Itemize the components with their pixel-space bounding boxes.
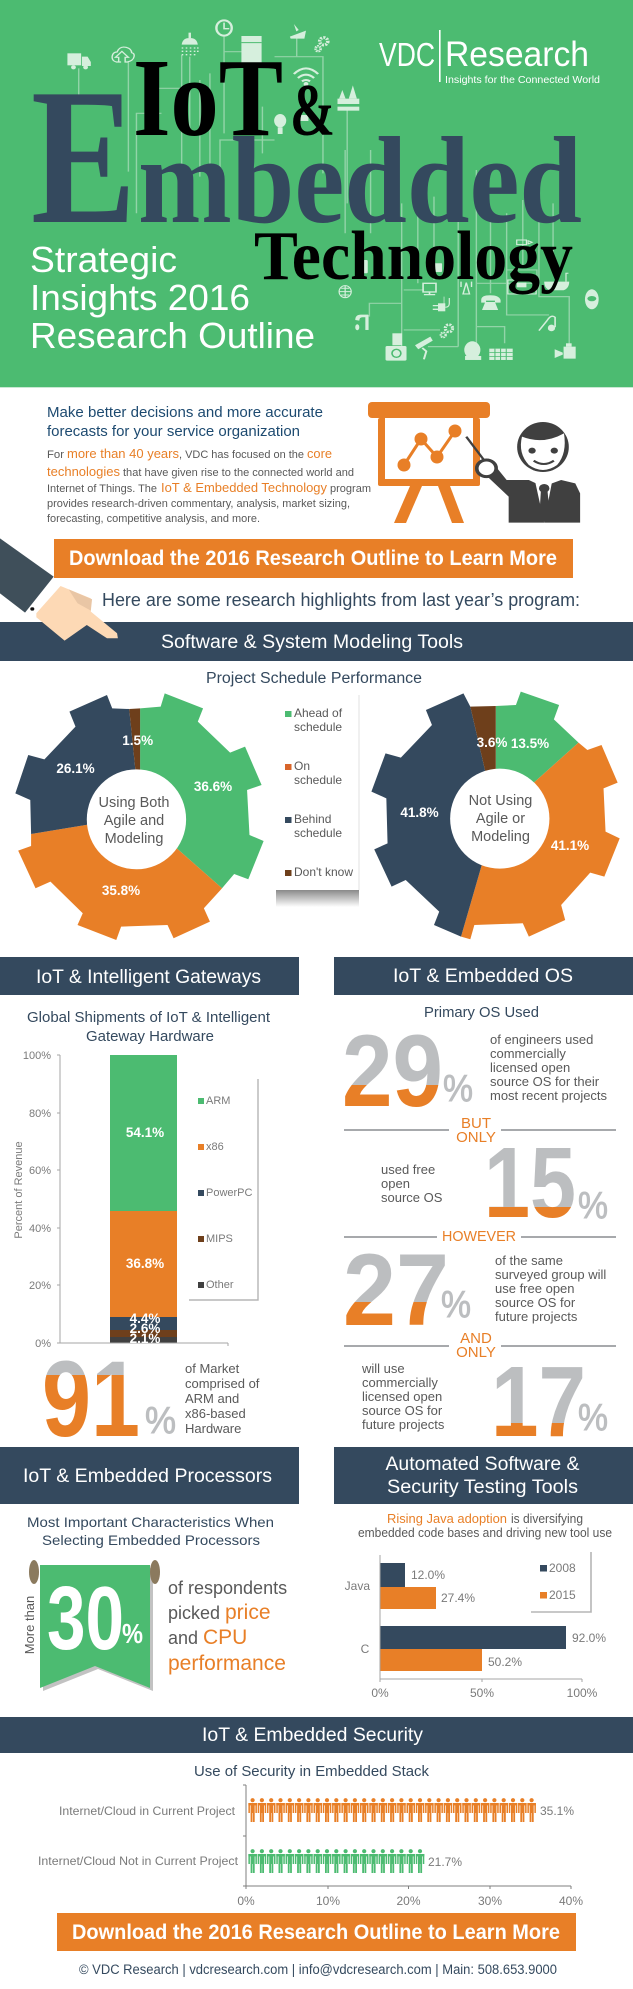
intro text block: more than 40 years — [67, 446, 179, 461]
callout: respondents picked price and CPU performance: price — [225, 1601, 271, 1624]
icon: gears small — [441, 325, 453, 337]
section header: processors: IoT & Embedded Processors — [23, 1466, 272, 1487]
legend: schedule status — [276, 695, 360, 907]
icons: connected devices — [67, 20, 599, 361]
header panel — [0, 0, 633, 388]
big stat: 91 percent: % — [145, 1400, 176, 1442]
big stat: 91 percent: 91 — [42, 1338, 140, 1459]
gear chart: using both agile and modeling — [15, 693, 264, 940]
gear chart: using both agile and modeling: Agile and — [104, 813, 164, 829]
icon: device — [508, 280, 536, 294]
intro text block: Make better decisions and more accurate — [47, 404, 323, 421]
big stat: 91 percent: of Market — [185, 1361, 240, 1376]
connector: and only — [344, 1330, 616, 1361]
gear chart: using both agile and modeling: Using Both — [99, 795, 169, 811]
stacked bar chart: 36.8% — [126, 1256, 164, 1271]
logo: VDC Research: VDC — [379, 36, 435, 73]
gear chart: not using agile or modeling: Not Using — [469, 793, 532, 809]
pictogram bar chart: Internet/Cloud in Current Project — [59, 1804, 236, 1818]
intro text block: technologies — [47, 464, 120, 479]
bar chart: language adoption: 50.2% — [488, 1655, 522, 1669]
connector: but only: ONLY — [456, 1129, 496, 1146]
big stat: 91 percent: ARM and — [185, 1391, 239, 1406]
stacked bar chart: 100% — [23, 1050, 51, 1062]
section header: gateways: IoT & Intelligent Gateways — [36, 967, 261, 988]
legend: architectures: Other — [206, 1279, 234, 1291]
chart title: processor characteristics: Selecting Embedded Processors — [42, 1532, 260, 1548]
section header: gateways — [0, 957, 299, 995]
circuit lines — [79, 35, 569, 347]
icon: clock — [216, 20, 232, 36]
intro text block: provides research-driven commentary, analysis, market sizing, — [47, 498, 350, 510]
banner: more than 30 percent — [22, 1560, 160, 1691]
section header: testing tools: Security Testing Tools — [387, 1477, 578, 1498]
intro text block: program — [330, 483, 371, 495]
callout: respondents picked price and CPU performance: picked — [168, 1603, 220, 1623]
logo: VDC Research: Insights for the Connected World — [445, 74, 600, 86]
section header: security: IoT & Embedded Security — [202, 1725, 424, 1746]
legend: years: 2015 — [549, 1588, 576, 1602]
stacked bar chart: 60% — [29, 1165, 51, 1177]
pictogram bar chart: 35.1% — [540, 1804, 574, 1818]
icon: telephone — [481, 295, 501, 310]
icon: refrigerator — [241, 36, 262, 66]
title: IoT & Embedded Technology: IoT — [133, 37, 283, 160]
logo: VDC Research: Research — [445, 35, 589, 74]
stacked bar chart: 80% — [29, 1108, 51, 1120]
intro text block: Internet of Things. The — [47, 483, 157, 495]
legend: years: 2008 — [549, 1561, 576, 1575]
connector: but only — [344, 1115, 616, 1146]
chart title: global shipments: Global Shipments of IoT & Intelligent — [27, 1010, 270, 1026]
chart title: global shipments: Gateway Hardware — [86, 1029, 214, 1045]
connector: and only: ONLY — [456, 1344, 496, 1361]
stat: 29 percent: source OS for their — [490, 1074, 600, 1089]
chart title: global shipments — [27, 1010, 270, 1045]
pictogram bar chart: 30% — [478, 1894, 502, 1908]
icon: video camera — [555, 343, 576, 359]
bar chart: language adoption: 100% — [567, 1686, 598, 1700]
legend: schedule status: Don't know — [294, 865, 353, 879]
stat: 17 percent: % — [578, 1397, 608, 1439]
icon: bulb — [274, 114, 286, 134]
bar chart: language adoption: 12.0% — [411, 1568, 445, 1582]
title: IoT & Embedded Technology: & — [290, 70, 335, 152]
gear chart: not using agile or modeling: 3.6% — [477, 735, 507, 750]
intro text block: For — [47, 449, 64, 461]
icon: security camera — [415, 337, 433, 359]
stat: 29 percent: commercially — [490, 1046, 566, 1061]
banner: more than 30 percent: % — [122, 1618, 143, 1649]
callout: respondents picked price and CPU performance: of respondents — [168, 1578, 287, 1598]
title: IoT & Embedded Technology — [31, 37, 582, 295]
big stat: 91 percent — [42, 1338, 260, 1459]
pictogram bar chart: 21.7% — [428, 1855, 462, 1869]
bar chart: language adoption — [345, 1555, 606, 1700]
stacked bar chart: 40% — [29, 1223, 51, 1235]
legend: architectures: MIPS — [206, 1233, 233, 1245]
icon: cloud upload — [112, 47, 134, 62]
icon: antenna — [461, 282, 472, 294]
icon: projector — [517, 240, 532, 245]
stat: 27 percent: 27 — [343, 1233, 449, 1347]
gear chart: using both agile and modeling: 26.1% — [56, 761, 95, 776]
stat: 27 percent: future projects — [495, 1309, 578, 1324]
chart title: processor characteristics: Most Important Characteristics When — [27, 1514, 274, 1530]
stacked bar chart: Percent of Revenue — [13, 1141, 25, 1239]
intro text block: IoT & Embedded Technology — [161, 480, 327, 495]
legend: architectures: PowerPC — [206, 1187, 253, 1199]
icon: wifi — [294, 68, 318, 85]
icon: server — [430, 263, 442, 272]
legend: architectures: x86 — [206, 1141, 224, 1153]
stat: 15 percent: source OS — [381, 1190, 443, 1205]
gear chart: not using agile or modeling: 13.5% — [511, 736, 549, 751]
icon: cake — [337, 85, 359, 111]
big stat: 91 percent: x86-based — [185, 1406, 246, 1421]
stat: 29 percent: 29 — [342, 1014, 443, 1128]
section header: embedded OS — [334, 957, 633, 995]
bar chart: language adoption: 0% — [371, 1686, 389, 1700]
callout: respondents picked price and CPU performance: and — [168, 1628, 198, 1648]
stacked bar chart: 2.1% — [130, 1331, 160, 1346]
intro text block: forecasting, competitive analysis, and more. — [47, 513, 260, 525]
connector: however: HOWEVER — [442, 1228, 516, 1245]
icon: vacuum cleaner — [539, 316, 555, 331]
subtitle: Insights 2016 — [30, 277, 250, 318]
legend: years — [531, 1552, 591, 1612]
stacked bar chart: 2.6% — [130, 1321, 160, 1336]
icon: globe — [339, 286, 351, 298]
pictogram bar chart: 10% — [316, 1894, 340, 1908]
stat: 15 percent: 15 — [484, 1127, 576, 1239]
gear chart: not using agile or modeling: 41.1% — [551, 838, 589, 853]
stat: 17 percent: licensed open — [362, 1389, 442, 1404]
footer: © VDC Research | vdcresearch.com | info@vdcresearch.com | Main: 508.653.9000 — [79, 1962, 557, 1977]
stat: 17 percent: source OS for — [362, 1403, 443, 1418]
connector: and only: AND — [460, 1330, 492, 1347]
icon: truck — [67, 53, 91, 69]
stat: 27 percent: use free open — [495, 1281, 575, 1296]
legend: schedule status: schedule — [294, 773, 342, 787]
callout: respondents picked price and CPU performance: CPU — [203, 1626, 247, 1649]
stat: 27 percent — [343, 1233, 606, 1347]
stacked bar chart: 20% — [29, 1280, 51, 1292]
callout: respondents picked price and CPU performance — [168, 1578, 287, 1675]
bar chart: language adoption: 92.0% — [572, 1631, 606, 1645]
stacked bar chart — [13, 1050, 228, 1350]
stat: 29 percent: of engineers used — [490, 1032, 593, 1047]
text block: rising java adoption: embedded code bases and driving new tool use — [358, 1526, 612, 1540]
stat: 15 percent — [381, 1127, 608, 1239]
intro text block: that have given rise to the connected world and — [123, 467, 354, 479]
subtitle: Strategic — [30, 239, 177, 280]
section header: software and system modeling tools: Software & System Modeling Tools — [161, 632, 463, 653]
banner: more than 30 percent: More than — [22, 1596, 37, 1654]
legend: schedule status: schedule — [294, 720, 342, 734]
button: download bottom: Download the 2016 Research Outline to Learn More — [72, 1921, 560, 1944]
connector: but only: BUT — [461, 1115, 491, 1132]
stacked bar chart: 0% — [35, 1338, 51, 1350]
bar chart: language adoption: C — [361, 1642, 370, 1656]
stat: 27 percent: surveyed group will — [495, 1267, 606, 1282]
stat: 27 percent: % — [441, 1284, 471, 1326]
bar chart: language adoption: Java — [345, 1579, 370, 1593]
gear chart: not using agile or modeling: Modeling — [471, 829, 530, 845]
stacked bar chart: 4.4% — [130, 1311, 160, 1326]
icon: presenter — [466, 422, 580, 523]
legend: architectures — [189, 1079, 258, 1300]
pictogram bar chart: Internet/Cloud Not in Current Project — [38, 1854, 239, 1868]
icon: presentation board with chart — [368, 402, 490, 523]
big stat: 91 percent: Hardware — [185, 1421, 241, 1436]
button: download top — [54, 539, 573, 578]
icon: robot head — [585, 289, 599, 309]
intro text block — [47, 404, 371, 525]
section header: processors — [0, 1447, 299, 1504]
icon: plug — [433, 298, 449, 311]
text block: rising java adoption — [358, 1512, 612, 1540]
text block: rising java adoption: Rising Java adoption — [387, 1512, 507, 1526]
logo: VDC Research — [379, 30, 600, 86]
stat: 15 percent: used free — [381, 1162, 435, 1177]
stat: 29 percent — [342, 1014, 608, 1128]
gear chart: not using agile or modeling — [371, 692, 620, 939]
subtitle — [30, 239, 315, 356]
button: download bottom — [57, 1913, 576, 1951]
stat: 17 percent: future projects — [362, 1417, 445, 1432]
stat: 29 percent: licensed open — [490, 1060, 570, 1075]
chart title: project schedule performance: Project Schedule Performance — [206, 670, 422, 687]
stacked bar chart: 54.1% — [126, 1125, 164, 1140]
icon: photo camera — [386, 333, 407, 361]
pictogram bar chart: 40% — [559, 1894, 583, 1908]
intro text block: forecasts for your service organization — [47, 423, 300, 440]
pictogram bar chart — [38, 1785, 583, 1908]
legend: schedule status: Behind — [294, 812, 331, 826]
icon: pointing hand — [0, 538, 118, 641]
stat: 29 percent: most recent projects — [490, 1088, 608, 1103]
stat: 17 percent — [361, 1346, 608, 1458]
icon: shower — [182, 33, 198, 55]
stat: 15 percent: % — [578, 1185, 608, 1227]
section header: testing tools — [334, 1447, 633, 1504]
legend: schedule status: On — [294, 759, 310, 773]
title: IoT & Embedded Technology: mbedded — [138, 112, 582, 249]
button: download top: Download the 2016 Research Outline to Learn More — [69, 547, 557, 570]
icon: monitor — [423, 283, 436, 295]
gear chart: not using agile or modeling: 41.8% — [400, 805, 439, 820]
callout: respondents picked price and CPU performance: performance — [168, 1652, 286, 1675]
subtitle: Research Outline — [30, 315, 315, 356]
icon: router — [298, 115, 308, 121]
banner: more than 30 percent: 30 — [47, 1569, 124, 1669]
intro text block: , VDC has focused on the — [179, 449, 304, 461]
chart title: processor characteristics — [27, 1514, 274, 1548]
icon: gears — [316, 38, 328, 51]
stat: 17 percent: commercially — [362, 1375, 438, 1390]
gear chart: using both agile and modeling: 35.8% — [102, 883, 140, 898]
highlights sentence: Here are some research highlights from last year’s program: — [102, 590, 580, 610]
bar chart: language adoption: 27.4% — [441, 1591, 475, 1605]
stat: 27 percent: of the same — [495, 1253, 563, 1268]
icon: dish — [290, 24, 306, 39]
icon: bathtub — [544, 273, 569, 290]
chart title: use of security: Use of Security in Embedded Stack — [194, 1763, 429, 1780]
big stat: 91 percent: comprised of — [185, 1376, 260, 1391]
section header: software and system modeling tools — [0, 622, 633, 661]
icon: faucet — [355, 315, 369, 330]
stat: 29 percent: % — [443, 1068, 473, 1110]
icon: washer — [362, 260, 368, 273]
legend: schedule status: schedule — [294, 826, 342, 840]
intro text block: core — [307, 446, 332, 461]
chart title: primary OS used: Primary OS Used — [424, 1005, 539, 1021]
gear chart: using both agile and modeling: 36.6% — [194, 779, 232, 794]
section header: testing tools: Automated Software & — [386, 1454, 580, 1475]
stat: 27 percent: source OS for — [495, 1295, 576, 1310]
title: IoT & Embedded Technology: E — [31, 49, 136, 265]
section header: embedded OS: IoT & Embedded OS — [393, 966, 573, 987]
stat: 15 percent: open — [381, 1176, 410, 1191]
gear chart: not using agile or modeling: Agile or — [476, 811, 525, 827]
title: IoT & Embedded Technology: Technology — [254, 218, 573, 295]
legend: architectures: ARM — [206, 1095, 230, 1107]
section header: security — [0, 1717, 633, 1753]
bar chart: language adoption: 50% — [470, 1686, 494, 1700]
pictogram bar chart: 20% — [396, 1894, 421, 1908]
legend: schedule status: Ahead of — [294, 706, 343, 720]
icon: bell — [464, 341, 481, 360]
stat: 17 percent: will use — [361, 1361, 405, 1376]
text block: rising java adoption: is diversifying — [511, 1512, 583, 1526]
stat: 17 percent: 17 — [491, 1346, 586, 1458]
icon: keyboard — [489, 349, 513, 360]
gear chart: using both agile and modeling: 1.5% — [122, 733, 153, 748]
pictogram bar chart: 0% — [237, 1894, 255, 1908]
gear chart: using both agile and modeling: Modeling — [105, 831, 163, 847]
icon: outlet — [517, 283, 526, 287]
